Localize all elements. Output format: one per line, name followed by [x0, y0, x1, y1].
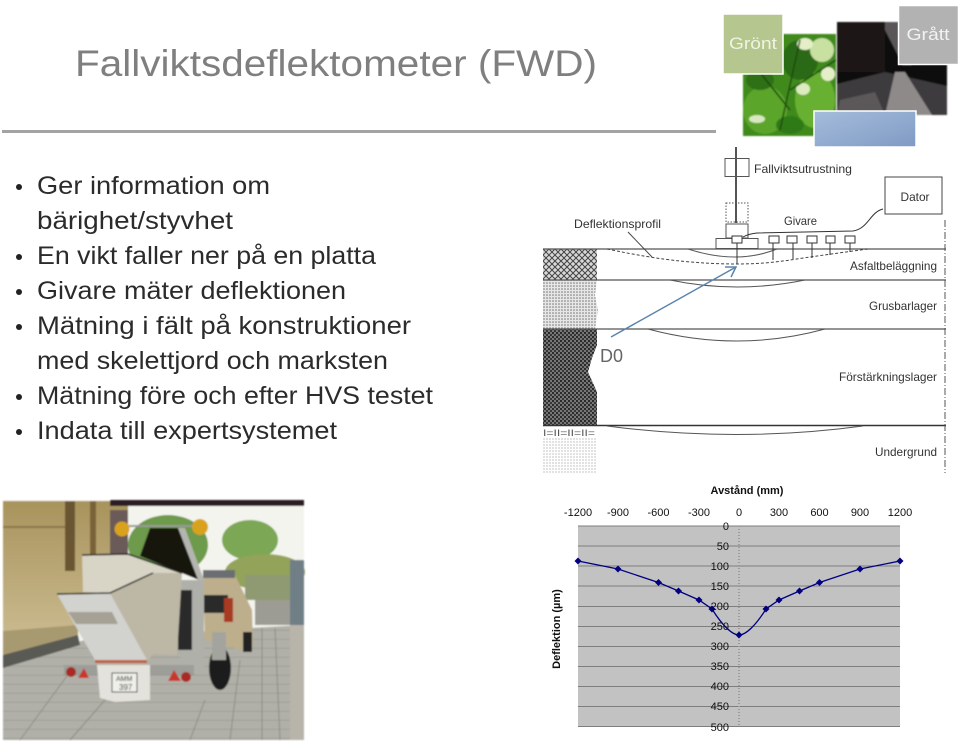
bullet list: Mätning före och efter HVS testet — [37, 382, 433, 410]
plot area — [578, 526, 900, 727]
wall and columns — [3, 501, 128, 631]
x axis labels: 1200 — [888, 507, 912, 519]
x axis labels: 600 — [810, 507, 829, 519]
bullet list: Ger information om — [37, 172, 270, 200]
y axis labels: 400 — [711, 681, 729, 693]
falling weight equipment — [716, 147, 758, 248]
computer box — [885, 177, 942, 214]
y axis labels: 250 — [711, 621, 729, 633]
grid — [578, 526, 900, 726]
y axis title: Deflektion (µm) — [551, 589, 563, 669]
x axis labels: -600 — [647, 507, 670, 519]
y axis labels: 300 — [711, 641, 729, 653]
diagram labels: Grusbarlager — [869, 299, 937, 313]
x axis labels: -1200 — [564, 507, 592, 519]
box: Grönt: Grönt — [729, 34, 777, 53]
y axis labels: 200 — [711, 601, 729, 613]
diagram labels: Förstärkningslager — [839, 370, 937, 384]
diagram labels — [574, 162, 937, 459]
trailer rear: AMM — [116, 676, 132, 683]
x axis labels: 900 — [851, 507, 869, 519]
bullet list: Mätning i fält på konstruktioner — [37, 312, 411, 340]
diagram labels: Asfaltbeläggning — [850, 259, 937, 273]
photo: city street — [837, 22, 947, 115]
y axis labels: 150 — [711, 581, 729, 593]
series line — [578, 561, 900, 635]
photo: blue sky — [814, 111, 916, 147]
computer box: Dator — [900, 190, 930, 204]
x axis labels: -900 — [607, 507, 629, 519]
bullet list: Indata till expertsystemet — [37, 417, 337, 445]
layer lines — [543, 220, 946, 473]
soil columns: I=II=II=II= — [543, 428, 595, 438]
bullet list: bärighet/styvhet — [37, 207, 233, 235]
x axis labels: 0 — [736, 507, 742, 519]
label D0: D0 — [600, 346, 623, 366]
photo: green leaves — [743, 34, 836, 136]
mast and lamps — [114, 519, 208, 590]
x axis labels: 300 — [770, 507, 788, 519]
box: Grått: Grått — [906, 25, 950, 44]
arrow to D0 — [611, 267, 736, 337]
bullet list: En vikt faller ner på en platta — [37, 242, 376, 270]
sensors — [732, 209, 883, 264]
chart: deflection profile — [551, 485, 912, 734]
y axis labels: 50 — [717, 541, 729, 553]
y axis labels: 500 — [711, 722, 729, 734]
box: Grönt — [723, 14, 783, 74]
hopper — [57, 554, 204, 670]
title: Fallviktsdeflektometer (FWD) — [75, 43, 597, 84]
diagram labels: Undergrund — [875, 445, 937, 459]
leader line — [628, 232, 652, 257]
y axis labels: 350 — [711, 661, 729, 673]
collage: Grönt and Grått — [723, 6, 958, 147]
diagram labels: Fallviktsutrustning — [754, 162, 852, 176]
trees and background — [128, 515, 305, 625]
trailer rear — [64, 632, 231, 702]
bullet list: med skelettjord och marksten — [37, 347, 388, 375]
photo: FWD trailer behind car — [3, 500, 305, 740]
series markers — [574, 558, 904, 638]
soil columns — [543, 249, 598, 473]
y axis labels: 450 — [711, 701, 729, 713]
y axis labels: 0 — [723, 521, 729, 533]
x axis title: Avstånd (mm) — [711, 485, 784, 497]
y axis labels — [711, 521, 729, 734]
bullet list: Givare mäter deflektionen — [37, 277, 346, 305]
x axis labels — [564, 507, 912, 519]
diagram: FWD pavement cross-section — [543, 147, 946, 473]
diagram labels: Givare — [784, 214, 817, 228]
car — [203, 570, 253, 652]
bullet list — [16, 172, 433, 445]
deflection profile — [607, 249, 868, 264]
pavement — [3, 625, 304, 740]
title underline — [2, 130, 716, 133]
box: Grått — [898, 6, 958, 64]
diagram labels: Deflektionsprofil — [574, 217, 661, 231]
y axis labels: 100 — [711, 561, 729, 573]
x axis labels: -300 — [688, 507, 710, 519]
trailer rear: 397 — [119, 683, 133, 692]
